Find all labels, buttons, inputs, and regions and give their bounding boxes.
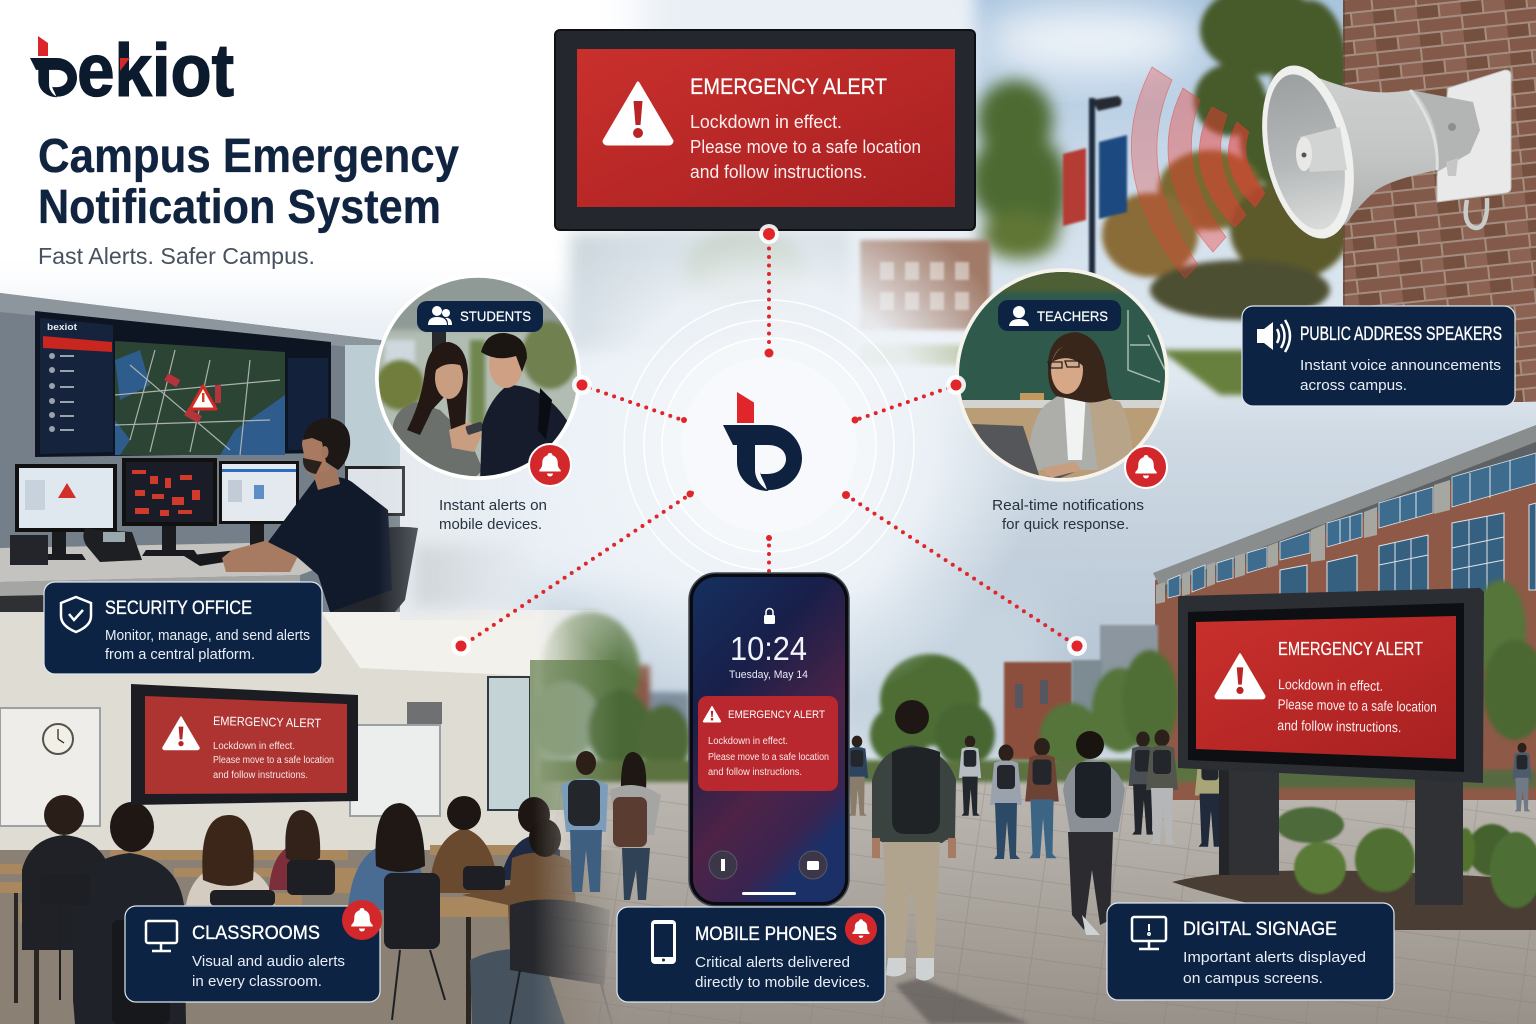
card: security office: Monitor, manage, and send alerts xyxy=(105,628,310,644)
icon: speaker xyxy=(1257,320,1290,352)
chair xyxy=(330,527,418,612)
desk xyxy=(0,543,312,582)
panel: top emergency display xyxy=(555,30,975,230)
foreground walker with brown bag xyxy=(610,752,661,900)
laptop xyxy=(972,424,1075,478)
desks xyxy=(0,845,520,923)
sound waves xyxy=(1131,67,1265,278)
wall monitor xyxy=(35,311,331,457)
panel: security office scene xyxy=(0,293,540,620)
panel: top emergency display: EMERGENCY ALERT xyxy=(690,74,887,99)
card: security office xyxy=(44,582,322,674)
classroom alert screen: Lockdown in effect. xyxy=(213,741,295,752)
classroom alert screen: and follow instructions. xyxy=(213,770,308,781)
phone: Lockdown in effect. xyxy=(708,736,788,747)
phone: 10:24 xyxy=(730,630,807,667)
phone: Tuesday, May 14 xyxy=(729,669,808,681)
panel: top emergency display: Please move to a safe location xyxy=(690,137,921,157)
phone: Please move to a safe location xyxy=(708,752,829,763)
panel: digital signage xyxy=(1172,588,1536,930)
lock icon xyxy=(764,608,775,624)
small monitors xyxy=(15,458,405,560)
connector nodes xyxy=(451,224,1087,656)
card: classrooms: Visual and audio alerts xyxy=(192,954,345,970)
caption: teachers: for quick response. xyxy=(1002,516,1129,533)
floor xyxy=(0,850,620,1024)
hub glow xyxy=(499,175,1039,715)
phone: and follow instructions. xyxy=(708,767,802,778)
planters xyxy=(1172,870,1536,930)
card: classrooms: in every classroom. xyxy=(192,974,322,990)
wall monitor: bexiot xyxy=(47,322,77,332)
teacher figure xyxy=(1026,332,1132,472)
student with grey shirt and backpack xyxy=(1063,731,1125,935)
campus building right xyxy=(531,425,1536,800)
card: digital signage: DIGITAL SIGNAGE xyxy=(1183,919,1337,940)
icon: display xyxy=(1132,917,1166,949)
distant buildings and trees xyxy=(1004,662,1072,760)
courtyard pedestrians xyxy=(561,700,1532,1024)
card: public address speakers: Instant voice announcements xyxy=(1300,358,1501,374)
caption: teachers: Real-time notifications xyxy=(992,497,1144,514)
pill label: students xyxy=(417,301,543,332)
heading: Notification System xyxy=(38,181,441,234)
icon: wall-mounted speaker horn xyxy=(1248,57,1511,247)
panel: digital signage: and follow instructions. xyxy=(1277,717,1402,735)
card: public address speakers: across campus. xyxy=(1300,378,1407,394)
foreground walker left xyxy=(561,751,608,892)
card: security office: from a central platform. xyxy=(105,647,255,663)
pill label: students: STUDENTS xyxy=(460,308,531,324)
ground xyxy=(440,775,1536,1024)
bell badge: mobile phones xyxy=(845,913,877,945)
student: girl xyxy=(393,342,484,482)
classroom alert screen xyxy=(131,684,358,805)
icon: warning triangle xyxy=(604,83,672,144)
classroom alert screen: Please move to a safe location xyxy=(213,755,334,766)
card: security office: SECURITY OFFICE xyxy=(105,598,252,619)
panel: teachers circle xyxy=(955,269,1170,488)
lamp post and banners xyxy=(1063,96,1127,276)
panel: digital signage: Please move to a safe location xyxy=(1278,696,1437,715)
panel: top emergency display: Lockdown in effect. xyxy=(690,112,842,132)
panel: digital signage: Lockdown in effect. xyxy=(1278,676,1383,694)
panel: top emergency display: and follow instructions. xyxy=(690,162,867,182)
card: mobile phones: directly to mobile devices. xyxy=(695,975,870,991)
chairs xyxy=(112,860,610,1024)
lower windows xyxy=(1280,503,1536,595)
card: digital signage: Important alerts displayed xyxy=(1183,950,1366,966)
phone xyxy=(689,573,849,906)
classroom alert screen: EMERGENCY ALERT xyxy=(213,714,322,730)
dotted connectors xyxy=(468,240,1071,642)
upper window band xyxy=(1168,453,1536,598)
brick wall xyxy=(1343,0,1536,402)
shadow xyxy=(895,978,1030,1024)
title text block xyxy=(30,29,459,234)
card: digital signage: on campus screens. xyxy=(1183,971,1323,987)
student: boy xyxy=(480,333,570,482)
bell badge xyxy=(1125,446,1167,488)
panel: students circle xyxy=(370,270,585,486)
card: mobile phones: MOBILE PHONES xyxy=(695,924,837,945)
card: public address speakers xyxy=(1242,306,1515,406)
desk phone and keyboard xyxy=(10,528,232,566)
central hub with logo xyxy=(624,300,914,590)
icon: monitor xyxy=(146,921,177,951)
caption: students: Instant alerts on xyxy=(439,497,547,514)
main walking student xyxy=(872,700,956,981)
students seated xyxy=(22,795,576,1024)
caption: students: mobile devices. xyxy=(439,516,542,533)
card: mobile phones xyxy=(617,907,885,1002)
icon: phone xyxy=(651,920,676,964)
columns xyxy=(1156,480,1450,604)
phone: EMERGENCY ALERT xyxy=(728,709,825,721)
bell badge xyxy=(529,444,571,486)
panel: digital signage: EMERGENCY ALERT xyxy=(1278,639,1423,659)
icon: shield xyxy=(61,597,91,632)
panel: classroom scene xyxy=(0,610,620,1024)
operator xyxy=(222,418,392,612)
card: classrooms xyxy=(125,906,380,1002)
heading: Campus Emergency xyxy=(38,130,459,183)
card: digital signage xyxy=(1107,903,1394,1000)
card: classrooms: CLASSROOMS xyxy=(192,923,320,944)
bell badge: classrooms xyxy=(342,900,382,940)
pill label: teachers: TEACHERS xyxy=(1037,308,1108,324)
card: mobile phones: Critical alerts delivered xyxy=(695,955,850,971)
pill label: teachers xyxy=(998,300,1121,331)
tagline: Fast Alerts. Safer Campus. xyxy=(38,243,315,269)
